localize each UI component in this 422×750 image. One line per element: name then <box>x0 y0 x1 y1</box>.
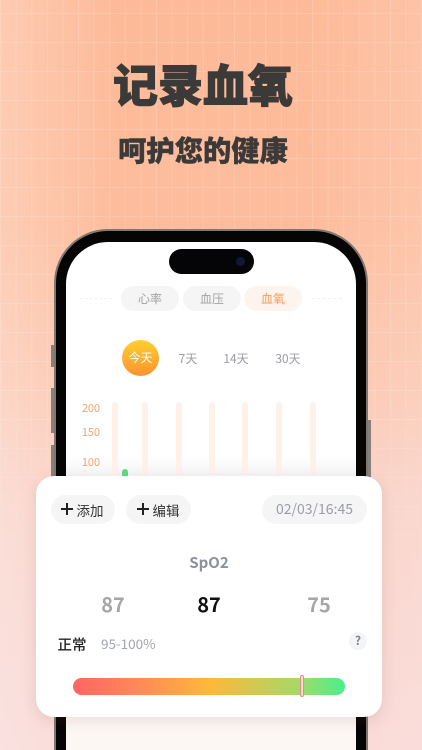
dynamic island <box>169 249 254 274</box>
range: today: 今天 <box>128 349 152 366</box>
phone frame <box>54 229 368 750</box>
tab: heart rate: 心率 <box>138 290 162 307</box>
card <box>36 476 382 717</box>
tab: heart rate <box>121 286 179 311</box>
phone screen <box>66 242 356 750</box>
scale marker <box>300 675 304 697</box>
tab: blood pressure <box>183 286 241 311</box>
help icon: ? <box>355 632 361 649</box>
range: 30 days: 30天 <box>275 350 301 367</box>
edit button <box>126 495 191 524</box>
timestamp: 02/03/16:45 <box>276 499 353 519</box>
green data bar <box>122 469 128 478</box>
add label: 添加 <box>76 500 104 520</box>
axis label 100: 100 <box>82 454 100 470</box>
axis label 150: 150 <box>82 424 100 440</box>
value left: 87 <box>101 589 125 618</box>
chart <box>82 400 316 476</box>
tab: blood oxygen: 血氧 <box>261 290 285 307</box>
title: 记录血氧 <box>113 50 293 115</box>
gradient scale <box>73 678 345 695</box>
status normal: 正常 <box>58 634 86 655</box>
normal range: 95-100% <box>101 633 156 653</box>
range: 14 days: 14天 <box>223 350 249 367</box>
edit label: 编辑 <box>152 500 180 520</box>
add button <box>51 495 115 524</box>
SpO2 label: SpO2 <box>189 552 229 573</box>
plus icon <box>137 503 149 515</box>
timestamp <box>262 495 367 524</box>
tab: blood pressure: 血压 <box>200 290 224 307</box>
camera <box>236 257 245 266</box>
tab: blood oxygen <box>244 286 302 311</box>
value center: 87 <box>197 589 221 618</box>
value right: 75 <box>307 589 331 618</box>
plus icon <box>61 503 73 515</box>
range: today <box>122 340 159 376</box>
range: 7 days: 7天 <box>179 350 197 367</box>
subtitle: 呵护您的健康 <box>118 129 288 170</box>
axis label 200: 200 <box>82 400 100 416</box>
help icon <box>349 632 367 650</box>
phone side buttons <box>51 345 371 478</box>
